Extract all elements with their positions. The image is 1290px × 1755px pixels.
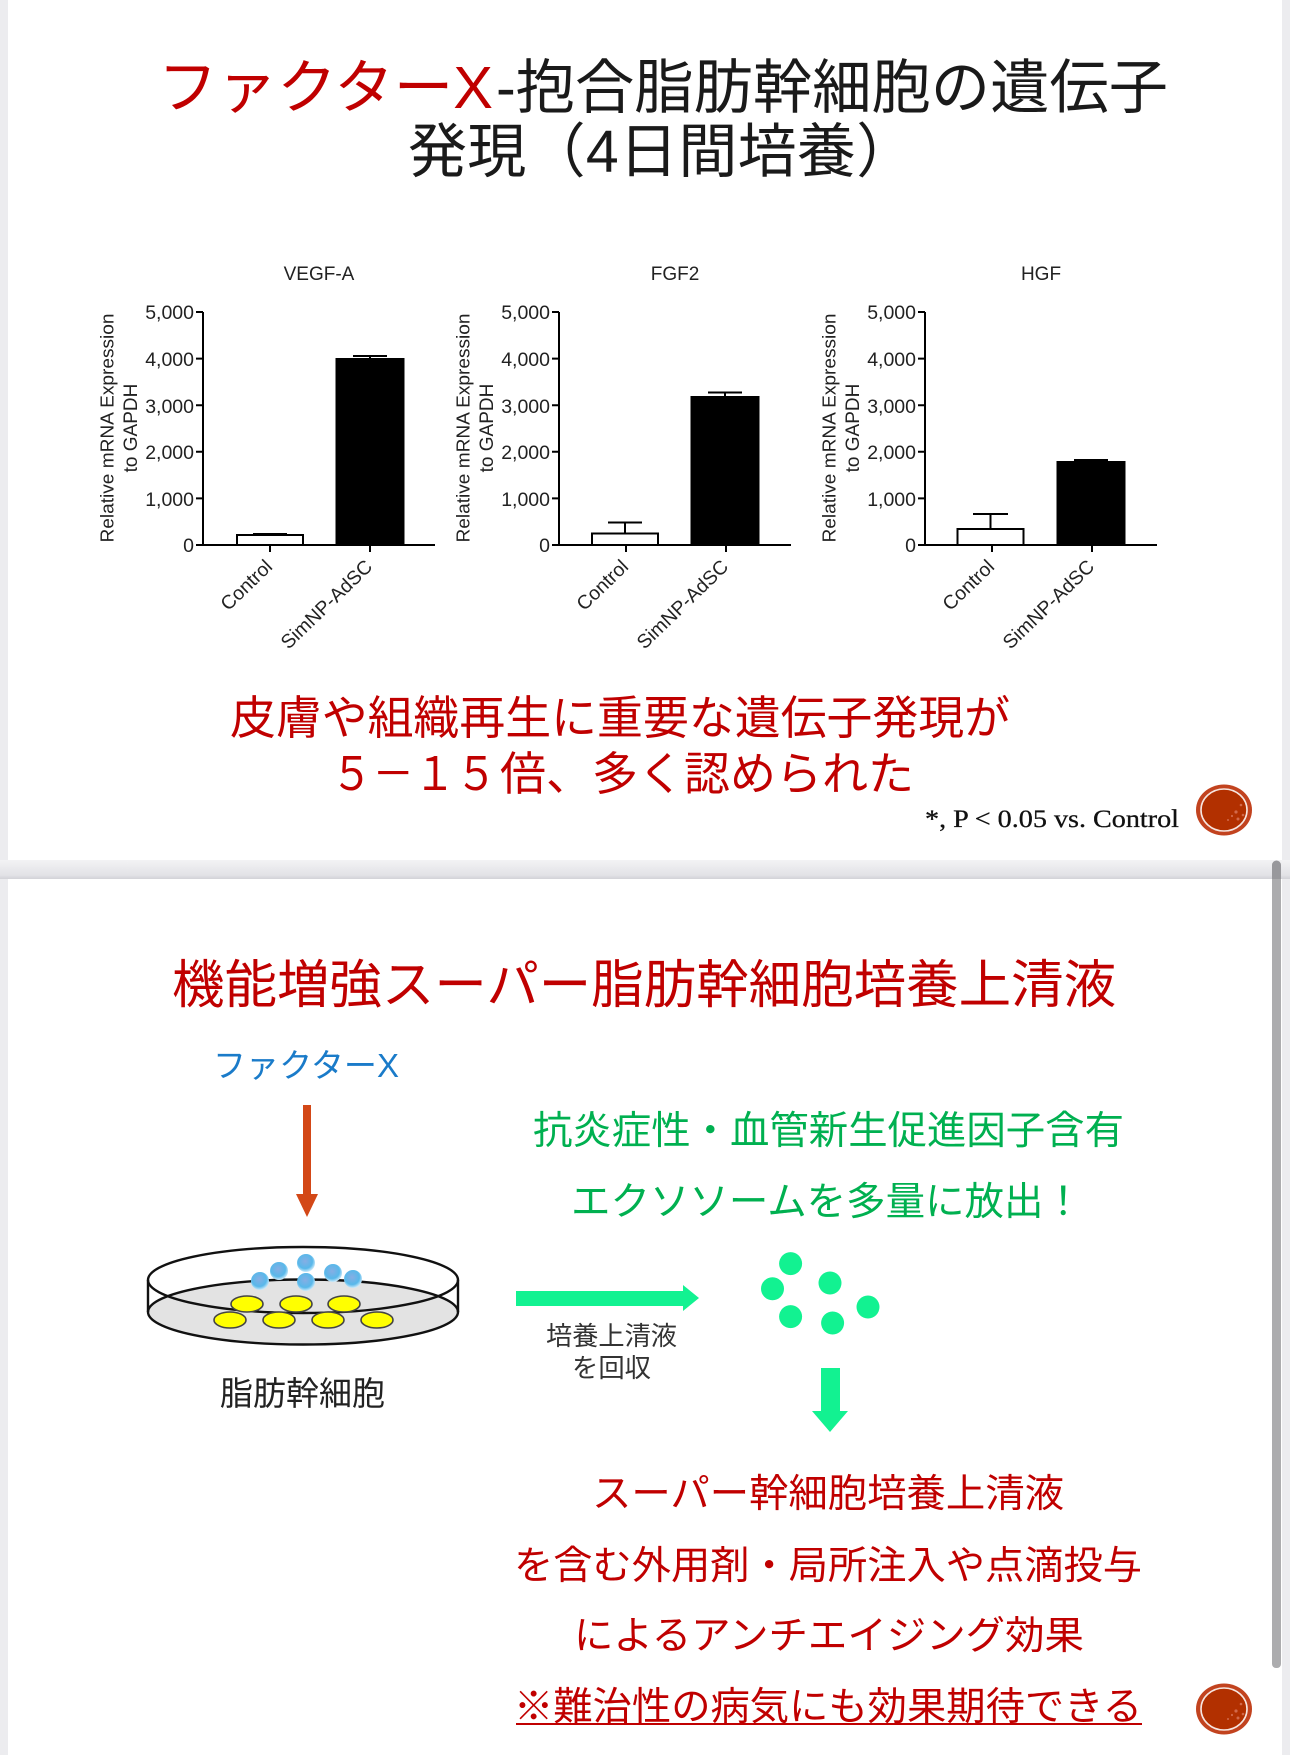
label: adipose stem cells: 脂肪幹細胞 bbox=[220, 1375, 385, 1412]
bar chart: VEGF-A: 4,000 bbox=[145, 349, 194, 371]
bar chart: HGF bbox=[818, 264, 1157, 654]
red text: product and effect: を含む外用剤・局所注入や点滴投与 bbox=[514, 1545, 1142, 1588]
bar chart: VEGF-A: 3,000 bbox=[145, 396, 194, 418]
title bbox=[158, 55, 1168, 185]
label: collect supernatant bbox=[546, 1321, 677, 1383]
label: Factor X: ファクターX bbox=[213, 1047, 399, 1084]
bar chart: HGF: 2,000 bbox=[867, 442, 916, 464]
bar chart: VEGF-A: SimNP-AdSC bbox=[277, 556, 377, 654]
bar chart: HGF: SimNP-AdSC bbox=[999, 556, 1099, 654]
bar chart: FGF2: Relative mRNA Expression bbox=[452, 314, 474, 542]
bar chart: FGF2: 4,000 bbox=[501, 349, 550, 371]
icon: petri dish with cells bbox=[148, 1247, 458, 1344]
bar chart: HGF: Relative mRNA Expression bbox=[818, 314, 840, 542]
title: ファクターX bbox=[158, 55, 493, 121]
bar chart: VEGF-A: Control bbox=[216, 556, 277, 615]
red text: product and effect: スーパー幹細胞培養上清液 bbox=[592, 1473, 1064, 1516]
blue factor particles bbox=[251, 1254, 362, 1291]
bar chart: FGF2: 1,000 bbox=[501, 489, 550, 511]
icon: red circle badge bbox=[1196, 1684, 1252, 1734]
red text: product and effect: によるアンチエイジング効果 bbox=[574, 1615, 1084, 1658]
result statement: 倍、多く認められた bbox=[500, 748, 914, 800]
bar chart: FGF2: Control bbox=[572, 556, 633, 615]
label: collect supernatant: 培養上清液 bbox=[546, 1321, 677, 1351]
arrow: down to product bbox=[812, 1368, 848, 1432]
bar chart: FGF2: 3,000 bbox=[501, 396, 550, 418]
bar chart: FGF2: 2,000 bbox=[501, 442, 550, 464]
red text: product and effect bbox=[514, 1473, 1142, 1729]
bar chart: FGF2: 5,000 bbox=[501, 302, 550, 324]
bar chart: VEGF-A: VEGF-A bbox=[284, 264, 355, 285]
bar chart: FGF2: FGF2 bbox=[651, 264, 699, 285]
arrow: factor X to dish bbox=[296, 1105, 318, 1217]
bar chart: VEGF-A: 2,000 bbox=[145, 442, 194, 464]
bar chart: VEGF-A: to GAPDH bbox=[121, 384, 142, 472]
icon: red circle badge bbox=[1196, 784, 1252, 836]
bar chart: FGF2 bbox=[452, 264, 791, 654]
panel: super stem cell conditioned medium slide bbox=[8, 879, 1282, 1755]
bar chart: FGF2: to GAPDH bbox=[477, 384, 498, 472]
bar chart: HGF: Control bbox=[938, 556, 999, 615]
label: collect supernatant: を回収 bbox=[572, 1353, 651, 1383]
result statement bbox=[230, 692, 1010, 800]
red text: product and effect: ※難治性の病気にも効果期待できる bbox=[514, 1686, 1142, 1729]
scrollbar bbox=[1272, 860, 1281, 1668]
bar chart: HGF: HGF bbox=[1021, 264, 1061, 285]
green text: exosome release: エクソソームを多量に放出！ bbox=[571, 1181, 1083, 1224]
yellow cells bbox=[214, 1296, 393, 1328]
bar chart: FGF2: SimNP-AdSC bbox=[633, 556, 733, 654]
heading: 機能増強スーパー脂肪幹細胞培養上清液 bbox=[172, 957, 1116, 1015]
bar chart: HGF: 3,000 bbox=[867, 396, 916, 418]
bar chart: FGF2: 0 bbox=[539, 535, 550, 557]
bar chart: VEGF-A bbox=[96, 264, 435, 654]
significance note: *, P < 0.05 vs. Control bbox=[925, 806, 1179, 833]
green text: exosome release: 抗炎症性・血管新生促進因子含有 bbox=[533, 1110, 1124, 1153]
bar chart: VEGF-A: 0 bbox=[183, 535, 194, 557]
result statement: 皮膚や組織再生に重要な遺伝子発現が bbox=[230, 692, 1010, 744]
title: -抱合脂肪幹細胞の遺伝子 bbox=[496, 55, 1168, 121]
bar chart: VEGF-A: 1,000 bbox=[145, 489, 194, 511]
title: 発現（4日間培養） bbox=[408, 119, 916, 185]
window divider band bbox=[0, 860, 1290, 879]
bar chart: HGF: 0 bbox=[905, 535, 916, 557]
bar chart: HGF: 1,000 bbox=[867, 489, 916, 511]
bar chart: HGF: to GAPDH bbox=[843, 384, 864, 472]
bar chart: VEGF-A: Relative mRNA Expression bbox=[96, 314, 118, 542]
result statement: ５－１５ bbox=[331, 748, 497, 800]
bar chart: VEGF-A: 5,000 bbox=[145, 302, 194, 324]
bar chart: HGF: 4,000 bbox=[867, 349, 916, 371]
bar chart: HGF: 5,000 bbox=[867, 302, 916, 324]
green text: exosome release bbox=[533, 1110, 1124, 1224]
panel: gene expression slide bbox=[8, 0, 1282, 860]
exosome dots bbox=[761, 1252, 880, 1334]
arrow: collect supernatant bbox=[516, 1285, 699, 1311]
